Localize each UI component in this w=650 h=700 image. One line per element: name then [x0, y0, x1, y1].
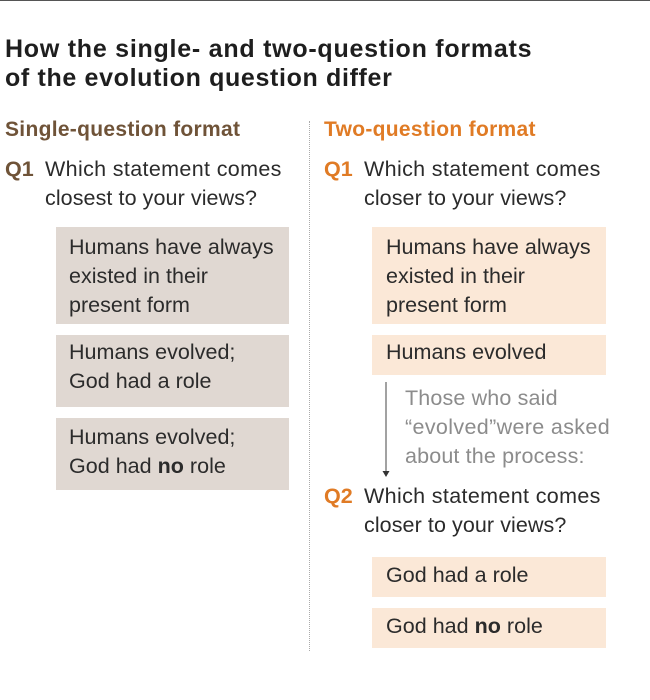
- heading: single-question format: Single-question format: [5, 118, 240, 141]
- question text: Which statement comes: [364, 484, 601, 508]
- arrow: [382, 382, 390, 477]
- title: [5, 35, 532, 92]
- option: God had no role: God had no role: [386, 614, 543, 638]
- option: always existed: present form: [69, 293, 190, 317]
- top rule: [0, 0, 650, 1]
- question text: [364, 484, 601, 537]
- option: always existed: [56, 227, 289, 324]
- option: evolved: Humans evolved: [386, 340, 546, 364]
- option: always existed: Humans have always: [386, 235, 591, 259]
- option: always existed: present form: [386, 293, 507, 317]
- title: of the evolution question differ: [5, 64, 392, 92]
- note: follow-up: about the process:: [405, 444, 585, 468]
- option: God had a role: [56, 335, 289, 407]
- title: How the single- and two-question formats: [5, 35, 532, 63]
- option: evolved: [372, 335, 606, 375]
- question text: closer to your views?: [364, 513, 566, 537]
- option: God had a role: Humans evolved;: [69, 340, 235, 364]
- note: follow-up: Those who said: [405, 386, 558, 410]
- option: God had a role: God had a role: [69, 369, 212, 393]
- option: always existed: Humans have always: [69, 235, 274, 259]
- question text: closer to your views?: [364, 186, 566, 210]
- question text: closest to your views?: [45, 186, 257, 210]
- option: God had no role: [372, 608, 606, 648]
- option: always existed: existed in their: [69, 264, 208, 288]
- label: Q1: Q1: [324, 157, 353, 181]
- option: God had a role: God had a role: [386, 563, 529, 587]
- option: God had no role: [56, 418, 289, 490]
- note: follow-up: [405, 386, 610, 468]
- question text: [364, 157, 601, 210]
- question text: Which statement comes: [364, 157, 601, 181]
- option: always existed: existed in their: [386, 264, 525, 288]
- divider: [309, 121, 310, 651]
- option: God had no role: Humans evolved;: [69, 425, 235, 449]
- label: Q1: Q1: [5, 157, 34, 181]
- question text: [45, 157, 282, 210]
- option: God had no role: God had no role: [69, 454, 226, 478]
- question text: Which statement comes: [45, 157, 282, 181]
- label: Q2: Q2: [324, 484, 353, 508]
- panel: single-question format: [5, 118, 289, 490]
- note: follow-up: “evolved”were asked: [405, 415, 610, 439]
- option: God had a role: [372, 557, 606, 597]
- panel: two-question format: [324, 118, 610, 648]
- heading: two-question format: Two-question format: [324, 118, 536, 141]
- option: always existed: [372, 227, 606, 324]
